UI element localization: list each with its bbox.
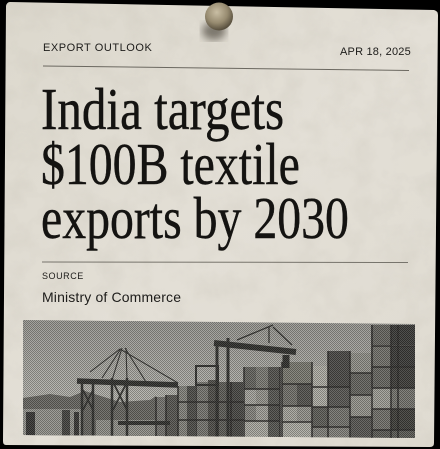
source name: Ministry of Commerce [42, 289, 181, 305]
headline: India targets [41, 76, 284, 142]
headline: $100B textile [41, 131, 300, 197]
headline [41, 76, 349, 251]
date: APR 18, 2025 [340, 46, 411, 58]
port photo [23, 320, 415, 438]
container stacks [156, 325, 415, 440]
headline: exports by 2030 [41, 185, 349, 251]
left crane [77, 348, 178, 436]
stack gridlines [156, 325, 415, 439]
pin shadow [200, 20, 228, 42]
source label: SOURCE [42, 271, 84, 281]
right crane [196, 325, 296, 438]
icon: brass pin [205, 2, 233, 30]
shoreline [23, 391, 170, 440]
category label: EXPORT OUTLOOK [43, 42, 152, 54]
